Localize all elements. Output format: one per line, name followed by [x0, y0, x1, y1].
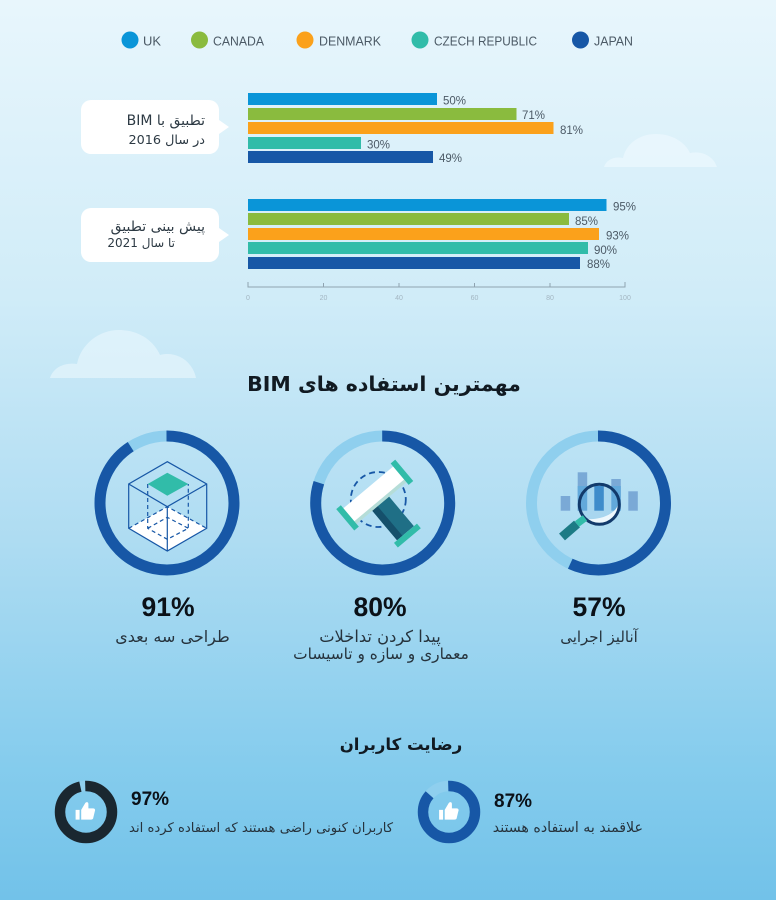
- bar chart: 2016: [248, 93, 583, 165]
- donut 87%: [423, 786, 475, 838]
- icon: pipe: [336, 460, 440, 562]
- icon: thumb up: [439, 802, 459, 820]
- ring 80%: [316, 436, 450, 570]
- value: 87%: [494, 791, 532, 812]
- panel: interested users: [423, 786, 643, 838]
- value: 97%: [131, 789, 169, 810]
- bar chart: 2021: 95%: [613, 202, 636, 214]
- legend: JAPAN: [594, 34, 633, 48]
- legend: [122, 32, 633, 48]
- label: پیدا کردن تداخلات: [319, 627, 441, 647]
- ring 91%: [100, 436, 234, 570]
- ring 57%: [532, 436, 666, 570]
- bar chart: 2016: 49%: [439, 153, 462, 165]
- value: 91%: [141, 592, 195, 622]
- bar chart: 2021: 93%: [606, 230, 629, 242]
- callout: forecast 2021: پیش بینی تطبیق: [111, 219, 205, 235]
- value: 57%: [572, 592, 626, 622]
- label: معماری و سازه و تاسیسات: [293, 645, 469, 663]
- donut 97%: [60, 786, 112, 838]
- chart axis: 60: [471, 295, 478, 302]
- chart axis: 0: [246, 295, 250, 302]
- label: طراحی سه بعدی: [115, 627, 230, 647]
- callout: adoption 2016: در سال 2016: [128, 133, 205, 148]
- icon: cube: [129, 462, 207, 551]
- bar chart: 2016: 81%: [560, 125, 583, 137]
- bar chart: 2016: 50%: [443, 96, 466, 108]
- panel: clash detection: [293, 436, 469, 663]
- callout: forecast 2021: [81, 208, 229, 262]
- cloud: left: [50, 330, 196, 378]
- panel: operational analysis: [532, 436, 666, 646]
- panel: satisfied users: [60, 786, 394, 838]
- bar chart: 2016: 71%: [522, 110, 545, 122]
- chart axis: 100: [619, 295, 631, 302]
- legend: CZECH REPUBLIC: [434, 34, 537, 48]
- callout: adoption 2016: [81, 100, 229, 154]
- legend: UK: [143, 34, 161, 48]
- callout: forecast 2021: تا سال 2021: [107, 236, 175, 250]
- cloud: right: [604, 134, 717, 167]
- bar chart: 2021: 85%: [575, 216, 598, 228]
- value: 80%: [353, 592, 407, 622]
- label: علاقمند به استفاده هستند: [493, 820, 643, 836]
- chart axis: [246, 282, 631, 302]
- label: کاربران کنونی راضی هستند که استفاده کرده اند: [129, 821, 394, 836]
- bar chart: 2021: 88%: [587, 259, 610, 271]
- legend: DENMARK: [319, 34, 381, 48]
- label: [293, 627, 469, 663]
- icon: magnifier: [561, 472, 638, 537]
- heading: user satisfaction: رضایت کاربران: [340, 735, 462, 755]
- bar chart: 2021: 90%: [594, 245, 617, 257]
- bar chart: 2021: [248, 199, 636, 271]
- legend: CANADA: [213, 34, 264, 48]
- heading: top BIM uses: مهمترین استفاده های BIM: [247, 372, 521, 396]
- bar chart: 2016: 30%: [367, 140, 390, 152]
- panel: 3D design: [100, 436, 234, 647]
- callout: adoption 2016: تطبیق با BIM: [127, 113, 205, 129]
- chart axis: 20: [320, 295, 327, 302]
- icon: thumb up: [76, 802, 95, 820]
- chart axis: 80: [546, 295, 554, 302]
- chart axis: 40: [395, 295, 403, 302]
- label: آنالیز اجرایی: [560, 628, 639, 646]
